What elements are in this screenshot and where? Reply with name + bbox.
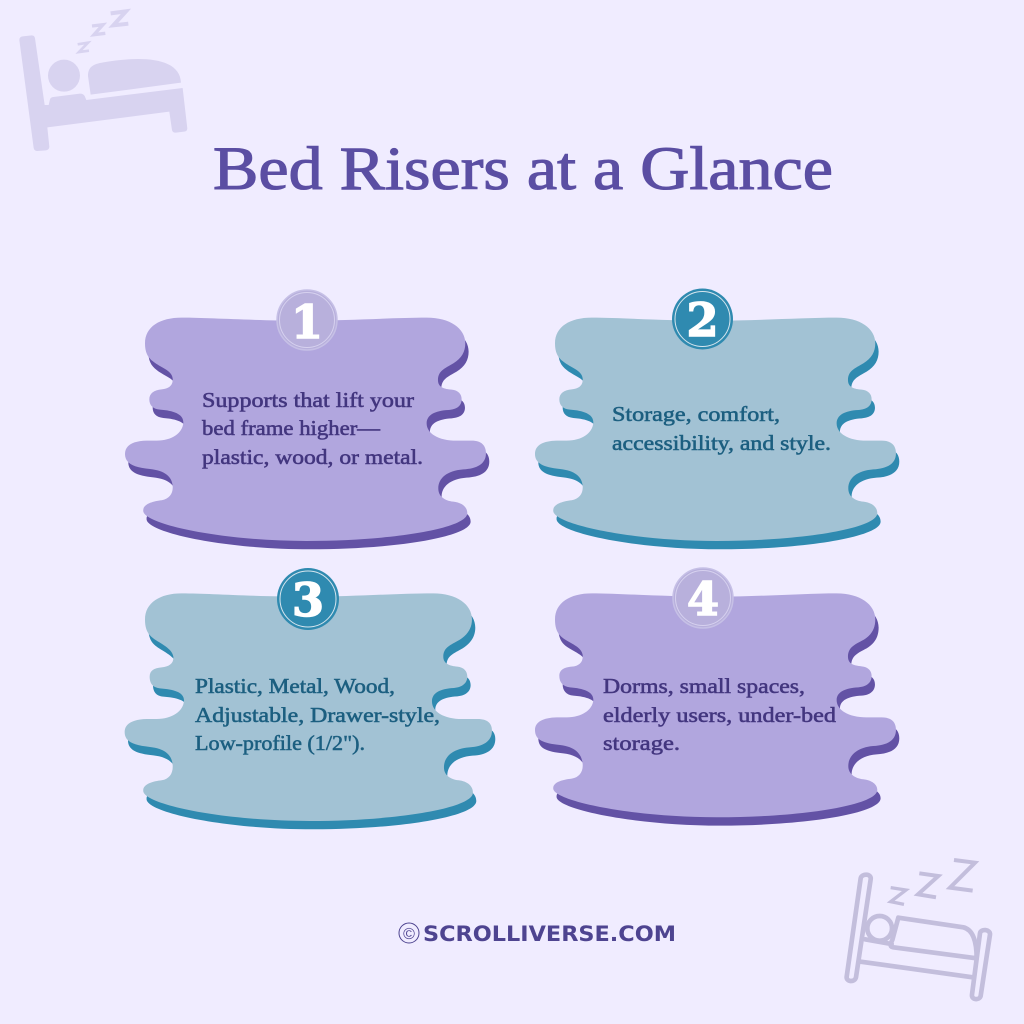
card 3 blob shape	[125, 593, 495, 829]
card 1 text: plastic, wood, or metal.	[202, 445, 423, 469]
panel: card 3	[125, 568, 495, 829]
card 2 text: accessibility, and style.	[612, 431, 831, 455]
card 4 blob shape	[535, 593, 899, 826]
number badge 2: 2	[686, 293, 719, 347]
panel: card 4	[535, 568, 899, 826]
number badge 2	[672, 288, 733, 350]
icon: sleeping person in bed, top left	[19, 11, 187, 151]
number badge 3: 3	[292, 573, 324, 627]
card 2 text: Storage, comfort,	[612, 402, 780, 426]
card 4 text: Dorms, small spaces,	[603, 674, 805, 698]
number badge 1: 1	[291, 295, 323, 349]
title: Bed Risers at a Glance	[213, 136, 833, 203]
panel: card 1	[125, 290, 489, 549]
card 3 text: Adjustable, Drawer-style,	[195, 703, 440, 727]
number badge 4: 4	[687, 572, 719, 626]
card 4 text: storage.	[603, 731, 680, 755]
panel: card 2	[535, 288, 899, 549]
card 2 blob shape	[535, 318, 899, 549]
card 3 text: Low-profile (1/2").	[195, 731, 365, 755]
card 1 text: bed frame higher—	[202, 416, 381, 440]
footer: website credit: ©	[403, 926, 415, 943]
number badge 3	[277, 568, 339, 630]
card 1 blob shape	[125, 318, 489, 549]
card 1 text: Supports that lift your	[202, 388, 414, 412]
footer: website credit: SCROLLIVERSE.COM	[423, 922, 676, 946]
icon: outlined sleeping person in bed, bottom right	[847, 860, 990, 999]
number badge 1	[277, 290, 337, 350]
card 4 text: elderly users, under-bed	[603, 703, 837, 727]
card 3 text: Plastic, Metal, Wood,	[195, 674, 395, 698]
number badge 4	[673, 568, 733, 628]
